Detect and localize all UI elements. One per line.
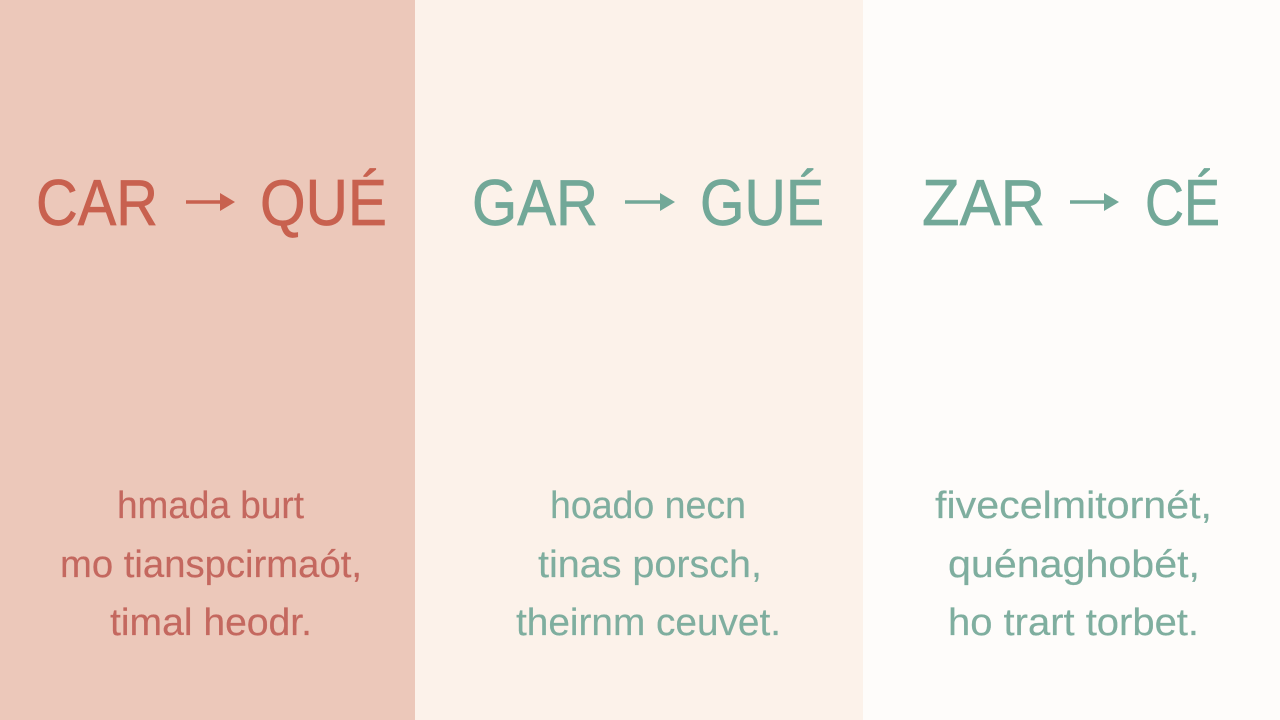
panel: zar bbox=[863, 0, 1280, 720]
panel: car bbox=[0, 0, 415, 720]
heading: zar to cé: ZAR bbox=[922, 166, 1045, 239]
heading: zar to cé bbox=[922, 166, 1220, 239]
heading: gar to gué bbox=[472, 166, 824, 239]
text block: zar: ho trart torbet. bbox=[948, 602, 1199, 644]
text block: zar bbox=[935, 485, 1212, 644]
text block: zar: quénaghobét, bbox=[948, 544, 1200, 586]
heading: gar to gué: GAR bbox=[472, 166, 598, 239]
text block: gar: hoado necn bbox=[550, 485, 746, 527]
text block: gar: theirnm ceuvet. bbox=[516, 602, 781, 644]
text block: gar: tinas porsch, bbox=[538, 544, 762, 586]
heading: car to qué: QUÉ bbox=[260, 166, 387, 239]
heading: car to qué bbox=[36, 166, 387, 239]
heading: car to qué: CAR bbox=[36, 166, 158, 239]
heading: zar to cé: CÉ bbox=[1145, 166, 1220, 239]
text block: car: mo tianspcirmaót, bbox=[60, 544, 362, 586]
heading: gar to gué: GUÉ bbox=[700, 166, 824, 239]
text block: zar: fivecelmitornét, bbox=[935, 485, 1212, 527]
panel: gar bbox=[415, 0, 863, 720]
text block: car: hmada burt bbox=[117, 485, 304, 527]
text block: car bbox=[60, 485, 362, 644]
text block: car: timal heodr. bbox=[110, 602, 312, 644]
text block: gar bbox=[516, 485, 781, 644]
